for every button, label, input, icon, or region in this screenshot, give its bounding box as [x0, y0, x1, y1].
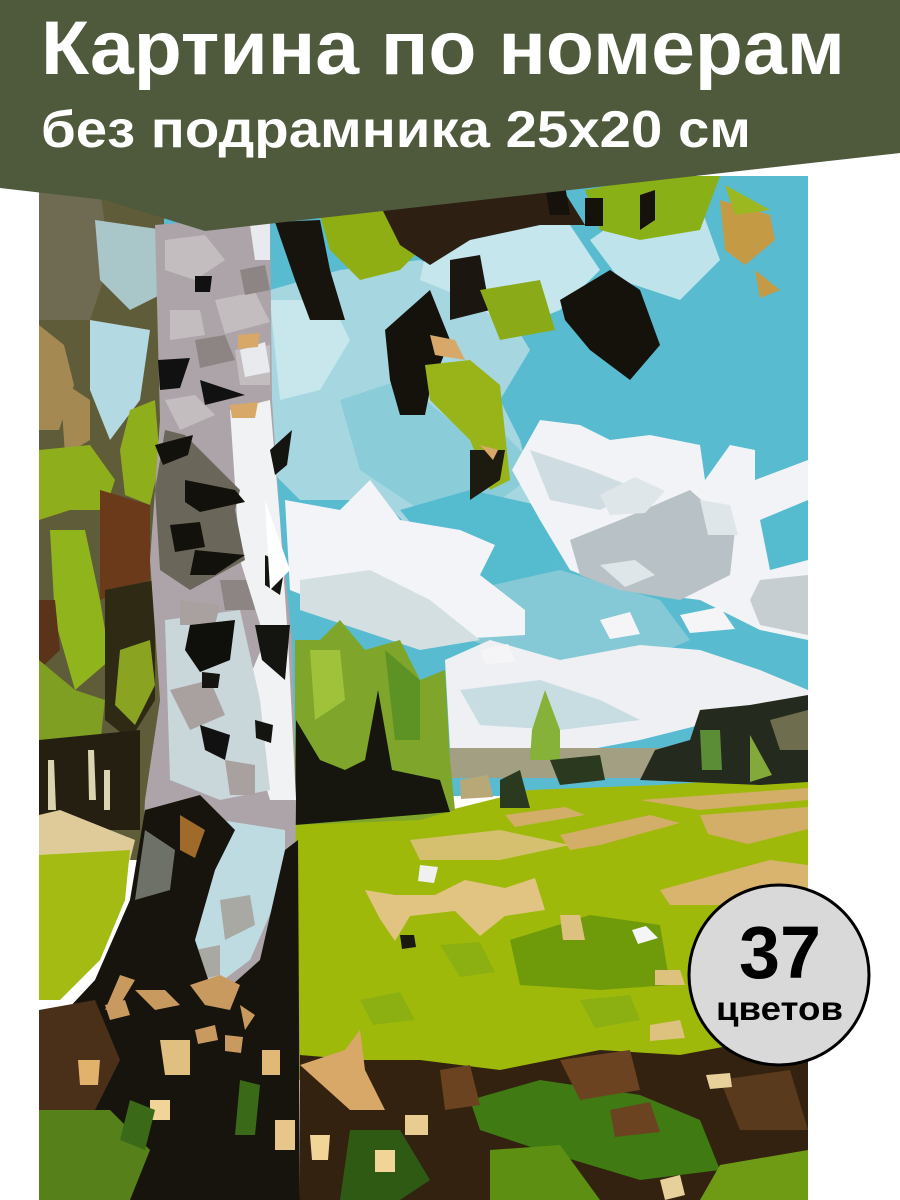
clouds [285, 420, 808, 755]
lower-left grass [39, 850, 130, 1000]
subtitle: без подрамника 25х20 см [41, 101, 751, 159]
overhanging birch leaves [275, 176, 780, 500]
meadow [295, 775, 808, 1080]
title: Картина по номерам [41, 6, 845, 91]
meadow patches [360, 788, 808, 1041]
left background foliage [39, 190, 170, 860]
right distant forest [460, 695, 808, 808]
badge number: 37 [739, 911, 821, 994]
header banner [0, 0, 900, 231]
painting: birch tree landscape [39, 176, 808, 1200]
foreground undergrowth [300, 1040, 808, 1200]
sky [39, 176, 808, 796]
birch trunk [140, 215, 296, 1000]
bark mottling [165, 235, 270, 430]
badge: 37 colours [689, 885, 869, 1065]
horizon and distant tree [450, 690, 670, 778]
bark flecks [105, 975, 255, 1053]
badge caption: цветов [716, 990, 843, 1027]
dark conifer group [295, 620, 455, 825]
trunk base [39, 795, 428, 1200]
